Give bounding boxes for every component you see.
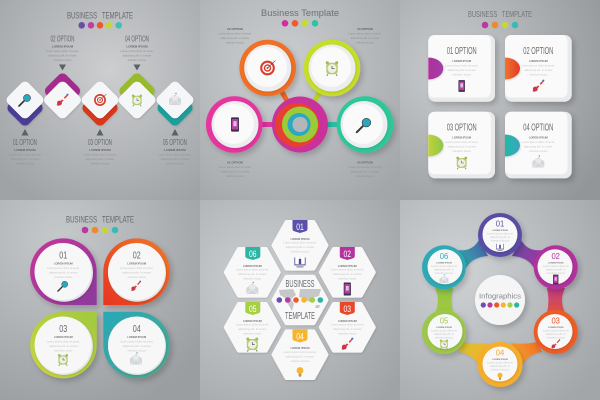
teardrop: 04: LOREM IPSUM xyxy=(127,335,147,339)
lower option texts: adipiscing elit. In ornare xyxy=(11,157,40,161)
card: 03 option: 03 OPTION xyxy=(447,122,477,134)
option texts: interdum luctus xyxy=(226,40,245,44)
ring node: 05: interdum luctus xyxy=(435,336,454,340)
ring node: 03: interdum luctus xyxy=(547,336,565,340)
hexagon: 01: interdum luctus xyxy=(291,250,310,254)
teardrop: 01: interdum luctus xyxy=(54,275,73,279)
ring node: 06: interdum luctus xyxy=(435,271,454,275)
card: 02 option: LOREM IPSUM xyxy=(529,59,549,63)
teardrop: 03 xyxy=(30,312,97,378)
hexagon: center title xyxy=(274,277,326,323)
hexagon: 06 xyxy=(226,247,279,296)
option texts: adipiscing elit. In ornare xyxy=(351,36,380,40)
hexagon: 05: 05 xyxy=(249,304,257,314)
heading: diamond steps: BUSINESS TEMPLATE xyxy=(67,10,133,22)
lower option texts: 03 OPTION xyxy=(88,137,112,147)
hexagon: 03 xyxy=(321,302,374,351)
teardrop: 01: Lorem ipsum dolor sit amet, xyxy=(47,266,80,270)
ring node: 06 xyxy=(422,245,466,289)
heading: teardrop quadrants: BUSINESS TEMPLATE xyxy=(66,214,134,226)
hexagon: 05 xyxy=(226,302,279,352)
option texts: Lorem ipsum dolor sit amet, xyxy=(218,165,252,169)
ring node: 03: LOREM IPSUM xyxy=(548,327,564,329)
ring node: 01: adipiscing elit. In xyxy=(490,235,510,239)
ring connectors xyxy=(435,240,565,364)
hexagon: 02: 02 xyxy=(344,249,351,259)
ring node: 01: interdum luctus xyxy=(491,238,510,242)
hexagon: 03: LOREM IPSUM xyxy=(338,319,358,323)
option texts: Lorem ipsum dolor sit amet, xyxy=(348,32,382,36)
teardrop: 04: Lorem ipsum dolor sit amet, xyxy=(120,340,154,344)
panel: circular ring xyxy=(400,200,600,400)
lower option texts: LOREM IPSUM xyxy=(89,148,111,152)
upper option texts: LOREM IPSUM xyxy=(126,44,148,48)
card: 04 option: Lorem ipsum dolor sit amet, xyxy=(522,140,555,144)
heading: teardrop quadrants xyxy=(66,214,134,233)
option texts: adipiscing elit. In ornare xyxy=(221,170,250,174)
hexagon: 05: interdum luctus xyxy=(243,332,262,336)
upper option texts: adipiscing elit. In ornare xyxy=(48,54,77,58)
circle: 02 target xyxy=(239,40,296,96)
card: 04 option: 04 OPTION xyxy=(523,122,553,134)
teardrop: 03: LOREM IPSUM xyxy=(54,335,74,339)
option texts xyxy=(218,27,382,178)
hexagon: 01: adipiscing elit. In ornare xyxy=(286,245,315,249)
ring node: 05: LOREM IPSUM xyxy=(436,327,452,329)
card: 04 option: LOREM IPSUM xyxy=(529,136,549,140)
card: 04 option: adipiscing elit. In ornare xyxy=(524,144,553,148)
hexagon: 02: interdum luctus xyxy=(338,276,357,280)
lower option texts: interdum luctus xyxy=(166,162,185,166)
white diamonds xyxy=(4,79,196,121)
lower option texts: LOREM IPSUM xyxy=(164,148,186,152)
arrows xyxy=(22,64,178,136)
hexagon: 04: interdum luctus xyxy=(291,359,310,363)
hexagon: 04: Lorem ipsum dolor sit amet, xyxy=(283,350,317,354)
upper option texts xyxy=(46,34,154,62)
teardrop: 02: interdum luctus xyxy=(128,275,146,279)
upper option texts: adipiscing elit. In ornare xyxy=(123,54,152,58)
card: 01 option: 01 OPTION xyxy=(447,45,477,57)
option texts: 03 OPTION xyxy=(357,27,373,31)
option texts: interdum luctus xyxy=(226,174,245,178)
upper option texts: 02 OPTION xyxy=(50,34,74,44)
card: 03 option: LOREM IPSUM xyxy=(452,136,472,140)
hexagon: 03: interdum luctus xyxy=(338,332,357,336)
lower option texts: interdum luctus xyxy=(16,162,35,166)
center circle: infographics xyxy=(475,275,525,325)
teardrop: 04 xyxy=(103,312,170,378)
lower option texts: interdum luctus xyxy=(91,162,110,166)
card: 03 option: Lorem ipsum dolor sit amet, xyxy=(445,140,479,144)
colored diamond backs xyxy=(5,71,195,128)
heading: diamond steps xyxy=(67,10,133,29)
panel: hexagons xyxy=(200,200,400,400)
panel: diamond steps xyxy=(0,0,200,200)
teardrop: 02: LOREM IPSUM xyxy=(127,262,147,266)
card: 01 option xyxy=(428,35,495,102)
upper option texts: Lorem ipsum dolor sit amet, xyxy=(120,49,154,53)
option texts: adipiscing elit. In ornare xyxy=(351,170,380,174)
teardrop: 03: adipiscing elit. In ornare xyxy=(49,344,78,348)
lower option texts: LOREM IPSUM xyxy=(14,148,36,152)
ring node: 03: adipiscing elit. In xyxy=(546,332,566,336)
teardrop: 04: interdum luctus xyxy=(128,348,146,352)
card: 04 option: interdum luctus xyxy=(529,149,548,153)
upper option texts: 04 OPTION xyxy=(125,34,149,44)
hexagon: 06: LOREM IPSUM xyxy=(243,264,263,268)
lower option texts: 05 OPTION xyxy=(163,137,187,147)
ring node: 01: LOREM IPSUM xyxy=(492,230,508,232)
hexagon: 01: Lorem ipsum dolor sit amet, xyxy=(283,240,317,244)
teardrop: 02: 02 xyxy=(133,250,141,262)
card: 02 option: interdum luctus xyxy=(529,72,548,76)
hexagon: 06: interdum luctus xyxy=(243,276,262,280)
card: 02 option: adipiscing elit. In ornare xyxy=(524,68,553,72)
hexagon: 02 xyxy=(321,247,374,296)
teardrop: 02: adipiscing elit. In ornare xyxy=(123,270,151,274)
teardrop: 03: 03 xyxy=(59,324,68,335)
heading: connected circles: Business Template xyxy=(261,8,339,18)
ring node: 04: interdum luctus xyxy=(491,368,510,372)
teardrop: 03: Lorem ipsum dolor sit amet, xyxy=(47,340,80,344)
circle: 01 phone xyxy=(206,96,263,153)
ring node: 06: LOREM IPSUM xyxy=(436,262,452,264)
hexagon: 03: 03 xyxy=(344,304,351,314)
hexagon: 05: Lorem ipsum dolor sit amet, xyxy=(236,322,269,326)
connectors xyxy=(258,92,342,124)
ring node: 01 xyxy=(478,213,522,257)
ring node: 01: Lorem ipsum dolor sit xyxy=(487,232,513,236)
hexagon: 03: adipiscing elit. In ornare xyxy=(333,327,362,331)
center circle: infographics: Infographics xyxy=(479,292,521,301)
ring node: 02: interdum luctus xyxy=(547,271,565,275)
hexagon: 02: Lorem ipsum dolor sit amet, xyxy=(331,268,364,272)
ring node: 03: 03 xyxy=(551,316,560,326)
lower option texts xyxy=(8,137,192,166)
option texts: interdum luctus xyxy=(356,174,375,178)
hexagon: 04: adipiscing elit. In ornare xyxy=(286,354,315,358)
circle: 04 magnifier xyxy=(337,96,393,153)
panel: square cards xyxy=(400,0,600,200)
teardrop: 02 xyxy=(103,238,170,305)
lower option texts: Lorem ipsum dolor sit amet, xyxy=(158,152,192,156)
panel: connected circles xyxy=(200,0,400,200)
option texts: 01 OPTION xyxy=(227,160,243,164)
lower option texts: Lorem ipsum dolor sit amet, xyxy=(8,152,42,156)
hexagon: 04 xyxy=(274,330,326,378)
ring node: 03: Lorem ipsum dolor sit xyxy=(543,328,569,332)
ring node: 05: Lorem ipsum dolor sit xyxy=(431,328,457,332)
ring node: 03 xyxy=(534,310,578,354)
teardrop: 02: Lorem ipsum dolor sit amet, xyxy=(120,266,154,270)
panel: teardrop quadrants xyxy=(0,200,200,400)
ring node: 04 xyxy=(478,342,522,387)
heading: connected circles xyxy=(261,8,339,27)
card: 01 option: interdum luctus xyxy=(453,72,471,76)
ring node: 02 xyxy=(534,245,578,289)
lower option texts: adipiscing elit. In ornare xyxy=(86,157,115,161)
card: 03 option xyxy=(428,112,495,178)
diamond icons xyxy=(19,93,181,106)
hexagon: 04: LOREM IPSUM xyxy=(291,346,310,350)
hexagon: 03: Lorem ipsum dolor sit amet, xyxy=(331,322,364,326)
card: 01 option: Lorem ipsum dolor sit amet, xyxy=(445,64,479,68)
lower option texts: Lorem ipsum dolor sit amet, xyxy=(83,152,117,156)
hexagon: center title: TEMPLATE xyxy=(285,311,315,322)
card: 03 option: interdum luctus xyxy=(453,149,471,153)
hexagon: 02: LOREM IPSUM xyxy=(338,264,358,268)
ring node: 02: Lorem ipsum dolor sit xyxy=(543,264,569,268)
ring node: 04: adipiscing elit. In xyxy=(490,364,510,368)
card: 02 option: Lorem ipsum dolor sit amet, xyxy=(522,64,555,68)
ring node: 02: 02 xyxy=(551,252,560,261)
heading: square cards: BUSINESS TEMPLATE xyxy=(468,9,532,19)
ring node: 04: Lorem ipsum dolor sit xyxy=(487,360,513,364)
ring node: 01: 01 xyxy=(496,220,505,228)
world map xyxy=(279,289,321,311)
hexagon: 06: 06 xyxy=(249,249,257,259)
hexagon: 01 xyxy=(274,220,326,269)
upper option texts: interdum luctus xyxy=(128,58,147,62)
hexagon: 05: LOREM IPSUM xyxy=(243,319,263,323)
upper option texts: interdum luctus xyxy=(53,58,72,62)
hexagon: 05: adipiscing elit. In ornare xyxy=(238,327,267,331)
hexagon: 06: adipiscing elit. In ornare xyxy=(238,272,267,276)
option texts: Lorem ipsum dolor sit amet, xyxy=(218,32,252,36)
center rings xyxy=(272,96,328,152)
heading: square cards xyxy=(468,9,532,28)
ring node: 02: LOREM IPSUM xyxy=(548,262,564,264)
ring node: 04: 04 xyxy=(496,348,505,358)
option texts: interdum luctus xyxy=(356,40,375,44)
option texts: 04 OPTION xyxy=(357,160,373,164)
ring node: 02: adipiscing elit. In xyxy=(546,267,566,271)
hexagon: 02: adipiscing elit. In ornare xyxy=(333,272,362,276)
ring node: 06: 06 xyxy=(440,252,449,261)
card: 02 option: 02 OPTION xyxy=(523,45,553,57)
card: 02 option xyxy=(505,35,572,102)
teardrop: 01: 01 xyxy=(59,250,68,262)
upper option texts: Lorem ipsum dolor sit amet, xyxy=(46,49,79,53)
lower option texts: adipiscing elit. In ornare xyxy=(161,157,190,161)
card: 01 option: LOREM IPSUM xyxy=(452,59,472,63)
teardrop: 04: 04 xyxy=(133,324,141,335)
teardrop: 01: LOREM IPSUM xyxy=(54,262,74,266)
circle: 03 clock xyxy=(304,40,360,96)
ring node: 05 xyxy=(422,310,466,354)
lower option texts: 01 OPTION xyxy=(13,137,37,147)
teardrop: 04: adipiscing elit. In ornare xyxy=(123,344,151,348)
card: 01 option: adipiscing elit. In ornare xyxy=(448,68,476,72)
option texts: Lorem ipsum dolor sit amet, xyxy=(348,165,382,169)
ring node: 04: LOREM IPSUM xyxy=(492,359,508,361)
ring node: 06: adipiscing elit. In xyxy=(434,267,454,271)
card: 04 option xyxy=(505,112,572,178)
ring node: 06: Lorem ipsum dolor sit xyxy=(431,264,457,268)
upper option texts: LOREM IPSUM xyxy=(52,44,74,48)
teardrop: 03: interdum luctus xyxy=(54,348,73,352)
hexagon: 04: 04 xyxy=(296,332,304,342)
option texts: 02 OPTION xyxy=(227,27,243,31)
card: 03 option: adipiscing elit. In ornare xyxy=(448,144,476,148)
ring node: 05: adipiscing elit. In xyxy=(434,332,454,336)
teardrop: 01 xyxy=(30,238,97,305)
teardrop: 01: adipiscing elit. In ornare xyxy=(49,270,78,274)
hexagon: 06: Lorem ipsum dolor sit amet, xyxy=(236,268,269,272)
ring node: 05: 05 xyxy=(440,316,449,326)
hexagon: center title: BUSINESS xyxy=(286,279,315,290)
option texts: adipiscing elit. In ornare xyxy=(221,36,250,40)
hexagon: 01: LOREM IPSUM xyxy=(291,237,310,241)
hexagon: 01: 01 xyxy=(296,222,304,232)
